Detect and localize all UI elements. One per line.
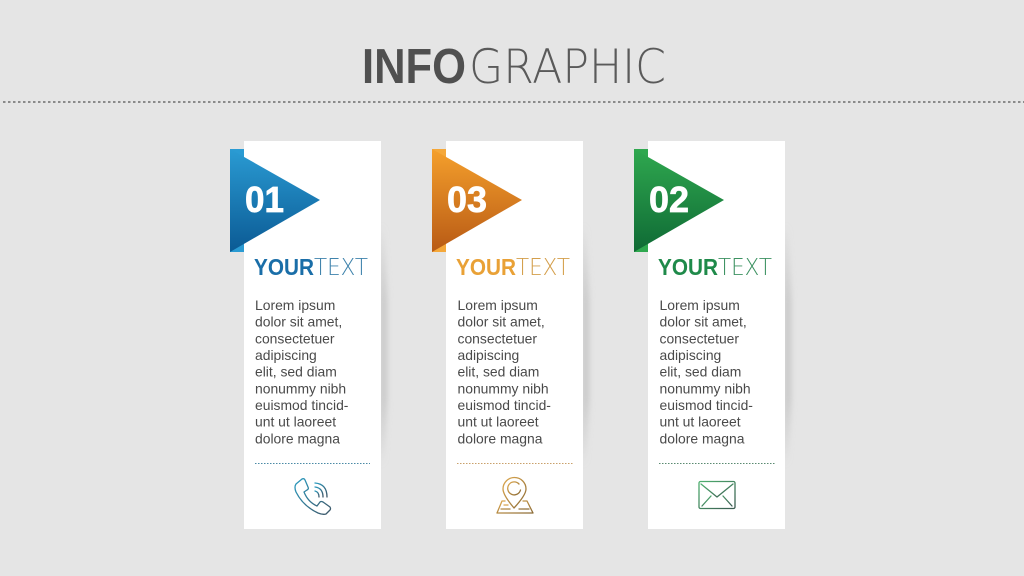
- card background 01: [244, 141, 381, 529]
- panel: card 01: [230, 141, 386, 529]
- icon: phone: [295, 479, 330, 514]
- title: [362, 40, 666, 95]
- body text 02: elit, sed diam: [660, 364, 741, 380]
- heading 01: [254, 254, 368, 281]
- body text 03: consectetuer: [458, 330, 537, 346]
- body text 02: unt ut laoreet: [660, 414, 741, 430]
- body text 03: Lorem ipsum: [458, 297, 538, 313]
- number badge 02: [634, 149, 724, 252]
- body text 01: Lorem ipsum: [255, 297, 335, 313]
- heading 02: [658, 254, 772, 281]
- body text 01: adipiscing: [255, 347, 317, 363]
- heading 03: [456, 254, 570, 281]
- number badge 02: 02: [649, 179, 689, 220]
- body text 02: adipiscing: [660, 347, 721, 363]
- body text 03: adipiscing: [458, 347, 519, 363]
- body text 01: unt ut laoreet: [255, 414, 336, 430]
- number badge 03: 03: [447, 179, 487, 220]
- body text 02: dolor sit amet,: [660, 314, 747, 330]
- heading 01: YOUR: [254, 254, 314, 280]
- body text 03: elit, sed diam: [458, 364, 539, 380]
- body text 03: euismod tincid-: [458, 397, 551, 413]
- body text 03: unt ut laoreet: [458, 414, 539, 430]
- body text 01: dolore magna: [255, 430, 340, 446]
- number badge 03: [432, 149, 522, 252]
- heading 03: YOUR: [456, 254, 516, 280]
- body text 01: elit, sed diam: [255, 364, 337, 380]
- body text 03: nonummy nibh: [458, 380, 549, 396]
- title: GRAPHIC: [469, 40, 666, 95]
- icon: envelope: [699, 482, 735, 508]
- body text 02: Lorem ipsum: [660, 297, 740, 313]
- body text 02: euismod tincid-: [660, 397, 753, 413]
- heading 02: YOUR: [658, 254, 718, 280]
- body text 01: nonummy nibh: [255, 380, 346, 396]
- heading 01: TEXT: [314, 255, 368, 281]
- body text 01: euismod tincid-: [255, 397, 349, 413]
- panel: card 02: [634, 141, 790, 529]
- number badge 01: [230, 149, 320, 252]
- panel: card 03: [432, 141, 588, 529]
- title: INFO: [362, 40, 466, 94]
- body text 01: consectetuer: [255, 330, 335, 346]
- body text 03: dolor sit amet,: [458, 314, 545, 330]
- heading 03: TEXT: [516, 255, 570, 281]
- body text 03: dolore magna: [458, 430, 543, 446]
- body text 01: dolor sit amet,: [255, 314, 342, 330]
- icon: map pin: [497, 478, 533, 513]
- body text 02: nonummy nibh: [660, 380, 751, 396]
- heading 02: TEXT: [718, 255, 772, 281]
- card background 02: [648, 141, 785, 529]
- card background 03: [446, 141, 583, 529]
- body text 02: consectetuer: [660, 330, 739, 346]
- body text 02: dolore magna: [660, 430, 745, 446]
- number badge 01: 01: [245, 179, 284, 220]
